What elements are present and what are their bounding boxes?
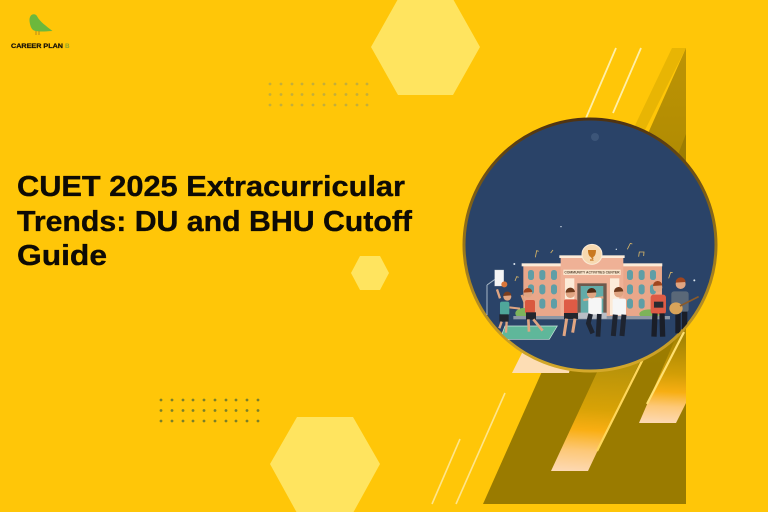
- title: CUET 2025 Extracurricular: [17, 171, 405, 203]
- sparkles: [513, 226, 695, 281]
- building: [513, 255, 670, 319]
- trophy medallion: [582, 244, 602, 264]
- dancer in red: [564, 288, 578, 336]
- small darker triangle: [672, 134, 686, 170]
- circle illustration: [464, 119, 716, 371]
- basketball hoop: [487, 270, 507, 315]
- guitarist: [669, 277, 699, 333]
- peach fragment: [512, 345, 575, 373]
- building: COMMUNITY ACTIVITIES CENTER: [564, 271, 620, 275]
- music notes: [515, 243, 673, 281]
- hexagon bottom: [270, 417, 380, 512]
- player in teal: [497, 289, 520, 333]
- logo letter B: B: [65, 43, 70, 50]
- hexagon middle: [351, 256, 389, 290]
- logo: Career Plan B: [11, 14, 70, 50]
- dot grid top: [269, 83, 368, 106]
- title: [17, 171, 412, 272]
- title: Trends: DU and BHU Cutoff: [17, 206, 412, 238]
- icon: green bird: [29, 14, 52, 35]
- diagonal lines top: [586, 48, 641, 118]
- highlight lines: [597, 332, 684, 451]
- faint trophy watermark: [591, 133, 599, 141]
- student with book: [651, 281, 666, 337]
- gradient strip left: [551, 340, 650, 471]
- diagonal lines bottom left: [432, 393, 505, 504]
- hexagon top: [371, 0, 480, 95]
- player in red: [522, 288, 543, 332]
- gradient strip right: [639, 330, 686, 423]
- dark gold triangle: [483, 48, 686, 504]
- dancer in white: [583, 288, 603, 337]
- title: Guide: [17, 240, 107, 272]
- logo wordmark: CAREER PLAN: [11, 43, 63, 50]
- dancer in white with crossed arms: [613, 287, 626, 336]
- dot grid bottom: [160, 399, 259, 422]
- community centre scene: [487, 226, 699, 339]
- upper light strip: [628, 48, 686, 140]
- windows: [528, 270, 656, 309]
- basketball court: [500, 326, 557, 339]
